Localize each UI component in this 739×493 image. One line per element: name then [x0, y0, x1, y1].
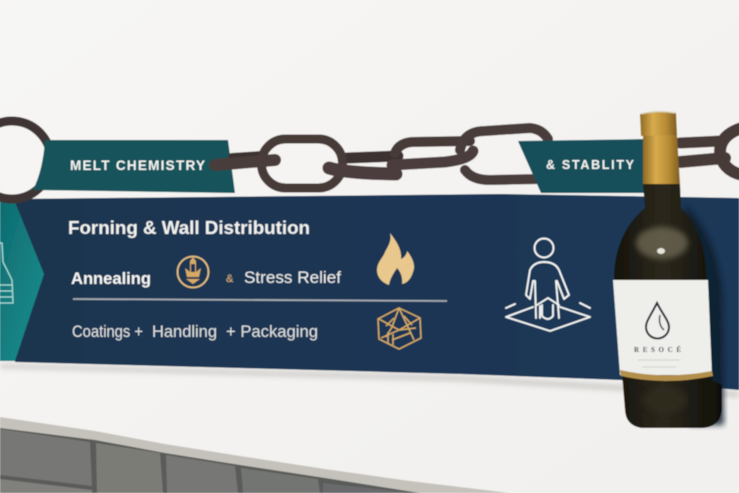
main navy panel	[14, 194, 739, 390]
text: coatings handling packaging: Coatings +	[72, 323, 143, 341]
icon: person on platform	[506, 238, 590, 331]
chain	[215, 128, 548, 188]
panel shadow	[0, 364, 739, 397]
link E	[460, 128, 548, 150]
tab label: & STABLITY	[546, 158, 635, 172]
label brand name: RESOCÉ	[634, 346, 681, 354]
tab label: MELT CHEMISTRY	[70, 158, 205, 173]
left ring link	[0, 121, 51, 199]
bottle glass	[614, 184, 722, 428]
bottle label	[613, 280, 713, 381]
right chain	[680, 128, 739, 175]
teal chevron	[0, 202, 44, 361]
capsule rim	[641, 112, 675, 114]
text: coatings handling packaging: + Packaging	[226, 323, 318, 341]
icon: bottle outline	[0, 243, 13, 303]
label gold band	[620, 370, 713, 381]
tab: stability	[518, 139, 650, 193]
link D	[395, 141, 470, 153]
rear chain bars	[232, 155, 398, 158]
icon: hexagon package	[378, 308, 421, 349]
text: ampersand: &	[226, 273, 234, 285]
text: coatings handling packaging	[72, 323, 318, 341]
heading: forning and wall distribution: Forning & Wall Distribution	[68, 218, 310, 238]
glass highlights	[636, 227, 688, 414]
capsule top	[640, 112, 677, 136]
brick ledge	[0, 417, 510, 493]
icon: label drop	[646, 303, 669, 338]
text: coatings handling packaging: Handling	[152, 323, 217, 341]
link C bar	[329, 168, 396, 174]
label fine print	[638, 360, 680, 367]
capsule	[643, 135, 680, 184]
text: annealing: Annealing	[71, 269, 151, 288]
text: stress relief: Stress Relief	[244, 268, 341, 287]
bottle shadow	[685, 205, 724, 425]
wine bottle	[613, 112, 722, 428]
icon: annealing emblem	[178, 256, 208, 288]
link D front	[392, 151, 473, 165]
link A bar	[215, 160, 275, 165]
icon: flame	[377, 233, 414, 285]
tab: melt chemistry	[33, 140, 235, 193]
divider line	[73, 299, 447, 301]
link B	[262, 139, 342, 188]
